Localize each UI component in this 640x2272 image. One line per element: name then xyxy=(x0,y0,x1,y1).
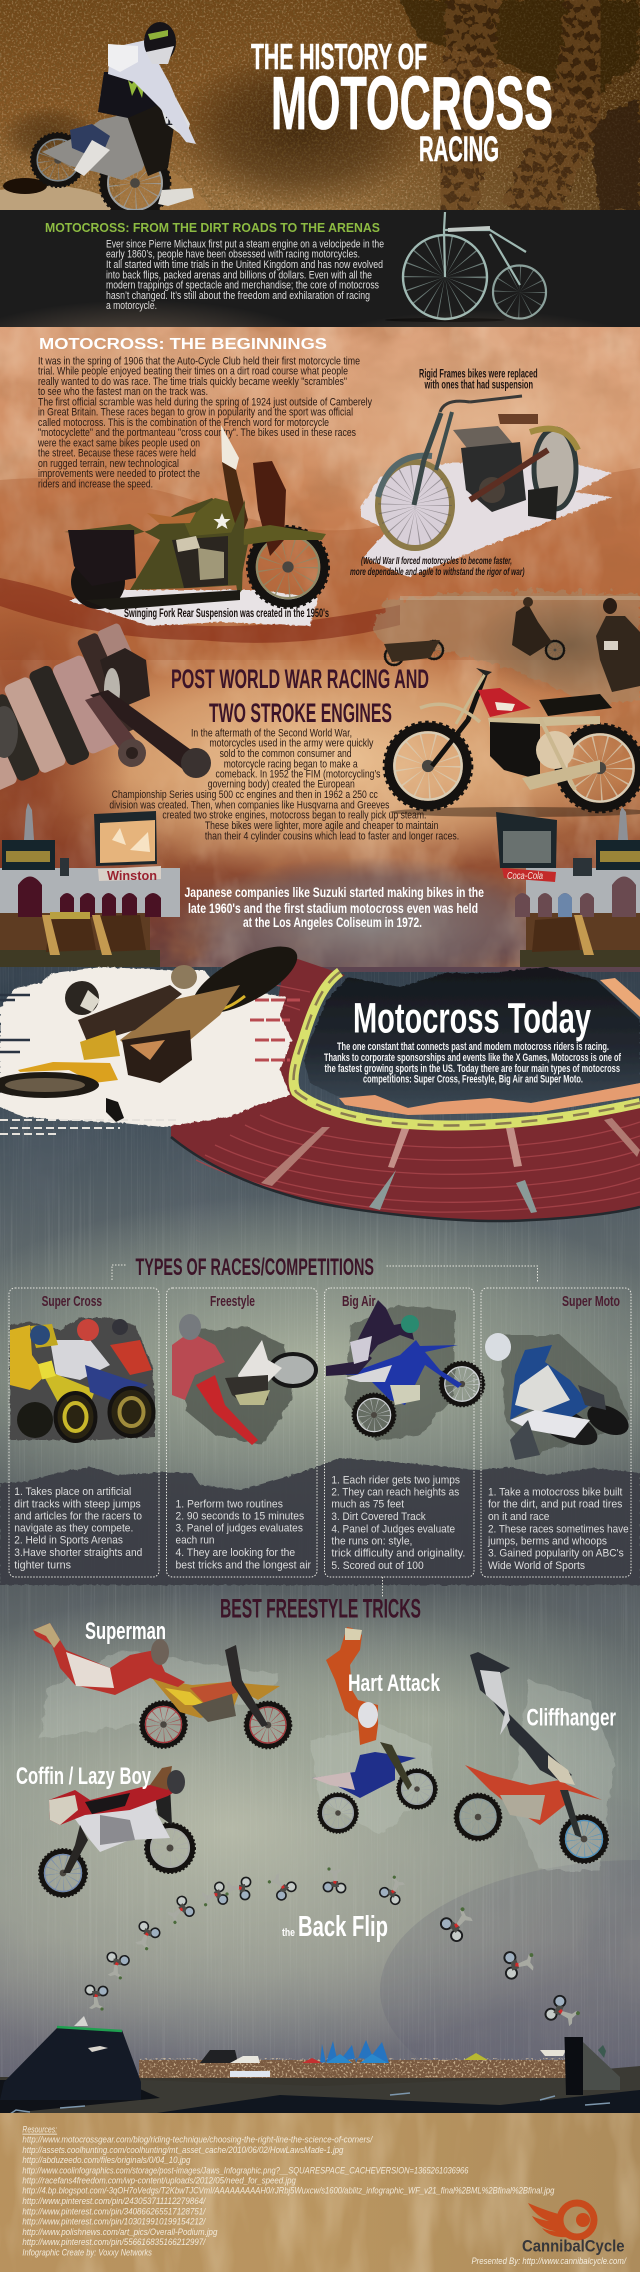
text block: freestyle facts xyxy=(176,1498,311,1571)
text block: freestyle facts: each run xyxy=(176,1535,214,1547)
heading: the beginnings: MOTOCROSS: THE BEGINNINGS xyxy=(39,336,327,353)
trick: superman xyxy=(33,1623,291,1748)
heading: from the dirt roads: MOTOCROSS: FROM THE DIRT ROADS TO THE ARENAS xyxy=(45,221,380,235)
label: the back flip: Back Flip xyxy=(298,1911,388,1943)
text block: the beginnings: "motocyclette" and the portmanteau "cross country". The bikes used in these races xyxy=(38,427,356,439)
illustration: coliseum right xyxy=(496,807,640,968)
photo: motocross rider on bike xyxy=(3,22,196,218)
text block: super moto facts: for the dirt, and put road tires xyxy=(488,1499,623,1511)
text block: post war: Championship Series using 500 cc engines and then in 1962 a 250 cc xyxy=(112,789,378,801)
text block: post war: than their 4 cylinder cousins which lead to faster and longer races. xyxy=(205,830,459,842)
text block: resources: http://racefans4freedom.com/wp-content/uploads/2012/05/need_for_speed.jpg xyxy=(22,2176,296,2186)
photo: crankshaft xyxy=(0,622,211,799)
illustration: mountain silhouette xyxy=(0,1458,640,1585)
text block: super cross facts: 1. Takes place on artificial xyxy=(14,1486,131,1498)
trick: back flip sequence xyxy=(74,1867,583,2031)
text block: post war xyxy=(109,727,459,842)
text block: resources: Resources: xyxy=(22,2125,57,2135)
caption: rigid frames: Rigid Frames bikes were replaced xyxy=(419,366,538,380)
ramp: landing xyxy=(564,2037,583,2095)
scoreboard right xyxy=(496,812,557,882)
text block: resources: http://www.pinterest.com/pin/556616835166212997/ xyxy=(22,2237,207,2247)
text block: resources: http://assets.coolhunting.com/coolhunting/mt_asset_cache/2010/06/02/HowLawsMade-1.jpg xyxy=(22,2145,343,2155)
text block: freestyle facts: 1. Perform two routines xyxy=(176,1498,283,1510)
scoreboard left xyxy=(94,811,161,883)
text block: the beginnings: to see who the fastest man on the track was. xyxy=(38,386,208,398)
text: japanese companies xyxy=(184,885,484,930)
panel: big air xyxy=(324,1288,484,1577)
text block: resources: http://www.polishnews.com/art_pics/Overall-Podium.jpg xyxy=(22,2227,217,2237)
text block: the beginnings: called motocross. This is the combination of the French word for motorcycle xyxy=(38,417,329,429)
caption: rigid frames xyxy=(419,366,538,391)
text: japanese companies: Japanese companies like Suzuki started making bikes in the xyxy=(184,885,484,900)
panel: warm textured history background xyxy=(0,300,640,993)
text block: the beginnings: The first official scramble was held during the spring of 1924 just outside of Camberely xyxy=(38,396,373,408)
text block: the beginnings: It was in the spring of 1906 that the Auto-Cycle Club held their first motorcycle time xyxy=(38,355,360,367)
text block: big air facts: 3. Dirt Covered Track xyxy=(331,1511,426,1523)
trick: hart attack xyxy=(310,1627,437,1835)
text block: motocross today xyxy=(324,1041,621,1086)
photo: rigid frame motorcycle xyxy=(361,396,612,577)
text block: big air facts: 5. Scored out of 100 xyxy=(331,1560,424,1572)
text block: the beginnings: the street. Because these races were held xyxy=(38,448,196,460)
text block: super cross facts: navigate as they compete. xyxy=(14,1523,133,1535)
illustration: stadium seating xyxy=(171,955,640,1221)
text block: super moto facts: 3. Gained popularity on ABC's xyxy=(488,1548,624,1560)
caption: world war II xyxy=(350,556,525,578)
header panel: dirt background xyxy=(0,0,640,215)
label: the back flip: the xyxy=(282,1927,295,1939)
text block: freestyle facts: 3. Panel of judges evaluates xyxy=(176,1523,303,1535)
text block: resources: http://4.bp.blogspot.com/-3qOH7oVedgs/T2KbwTJCVmI/AAAAAAAAAH0/rJRbj5Wuxcw/s1600/ablitz_infographic_WF_v21_final%2BML%2Bfinal%2Bfinal.jpg xyxy=(22,2186,554,2196)
text block: super cross facts: 3.Have shorter straights and xyxy=(14,1547,142,1559)
text block: big air facts: much as 75 feet xyxy=(331,1499,404,1511)
intro text: into back flips, packed arenas and billions of dollars. Even with all the xyxy=(106,269,372,281)
text block: post war: sold to the common consumer and xyxy=(220,748,352,760)
illustration: coliseum left xyxy=(0,803,180,968)
text block: post war: motorcycle racing began to make a xyxy=(224,758,358,770)
icon: penny-farthing bicycle xyxy=(385,212,546,322)
title: THE HISTORY OF xyxy=(251,36,427,77)
text block: resources: http://abduzeedo.com/files/originals/0/04_10.jpg xyxy=(22,2155,190,2165)
trick: coffin lazy boy xyxy=(39,1766,195,1897)
photo: motocross rider on bike: 16 xyxy=(165,112,181,128)
text block: resources: Infographic Create by: Voxxy Networks xyxy=(22,2247,152,2257)
text block: big air facts xyxy=(331,1474,465,1572)
photo: husqvarna two stroke motorcycle xyxy=(384,668,640,817)
logo: cannibal cycle xyxy=(522,2203,624,2256)
text: japanese companies: at the Los Angeles Coliseum in 1972. xyxy=(243,915,422,930)
heading: post world war racing: POST WORLD WAR RACING AND xyxy=(171,664,429,694)
text block: super moto facts: jumps, berms and whoops xyxy=(487,1535,607,1547)
heading: super cross: Super Cross xyxy=(42,1293,102,1310)
panel: cool slate background xyxy=(0,967,640,2120)
title: RACING xyxy=(419,130,499,169)
text block: super cross facts xyxy=(14,1486,142,1571)
logo: cannibal cycle: CannibalCycle xyxy=(522,2237,624,2256)
photo: super moto rider xyxy=(485,1333,633,1460)
text block: big air facts: the runs on: style, xyxy=(331,1535,412,1547)
text block: big air facts: trick difficulty and originality. xyxy=(331,1548,465,1560)
text block: the beginnings: improvements were needed to protect the xyxy=(38,468,200,480)
intro text: It all started with time trials in the United Kingdom and has now evolved xyxy=(106,259,383,271)
trick: cliffhanger xyxy=(455,1652,615,1870)
text block: big air facts: 2. They can reach heights as xyxy=(331,1487,460,1499)
photo: army motorcycle xyxy=(64,425,328,626)
text block: super moto facts xyxy=(487,1487,629,1572)
text block: resources: http://www.coolinfographics.com/storage/post-images/Jaws_Infographic.png?__SQUARESPACE_CACHEVERSION=1365261036966 xyxy=(22,2165,468,2175)
heading: types of races: TYPES OF RACES/COMPETITIONS xyxy=(136,1254,374,1281)
heading: big air: Big Air xyxy=(342,1293,376,1310)
ramp: launch xyxy=(0,2028,141,2100)
label: hart attack: Hart Attack xyxy=(348,1670,440,1697)
panel: super moto xyxy=(481,1288,633,1577)
text block: post war: In the aftermath of the Second World War, xyxy=(191,727,352,739)
caption: rigid frames: with ones that had suspension xyxy=(424,377,533,391)
text block: resources: http://www.pinterest.com/pin/243053711112279864/ xyxy=(22,2196,207,2206)
text block: the beginnings: in Great Britain. These races began to grow in popularity and the sport was official xyxy=(38,407,353,419)
intro text: a motorcycle. xyxy=(106,300,157,312)
illustration: ground, ramps and crowd xyxy=(0,2027,640,2114)
text block: resources xyxy=(22,2125,554,2257)
text block: super cross facts: dirt tracks with steep jumps xyxy=(14,1498,141,1510)
photo: rider with white splash xyxy=(0,933,307,1134)
label: superman: Superman xyxy=(85,1618,166,1645)
text block: the beginnings: really wanted to do was race. The time trials quickly became weekly "scrambles" xyxy=(38,376,347,388)
text: japanese companies: late 1960's and the first stadium motocross even was held xyxy=(188,901,478,916)
text block: resources: http://www.motocrossgear.com/blog/riding-technique/choosing-the-right-line-the-science-of-corners/ xyxy=(22,2135,374,2145)
text block: super moto facts: Wide World of Sports xyxy=(488,1560,585,1572)
heading: freestyle: Freestyle xyxy=(210,1293,255,1310)
text block: super moto facts: 2. These races sometimes have xyxy=(488,1523,629,1535)
caption: world war II: more dependable and agile to withstand the rigor of war) xyxy=(350,567,525,578)
text block: post war: created two stroke engines, motocross began to really pick up steam. xyxy=(162,809,426,821)
text block: the beginnings: riders and increase the speed. xyxy=(38,478,153,490)
text block: super moto facts: on it and race xyxy=(488,1511,549,1523)
text block: freestyle facts: 4. They are looking for the xyxy=(176,1547,295,1559)
scoreboard right: Coca-Cola xyxy=(507,871,543,882)
caption: swinging fork: Swinging Fork Rear Suspension was created in the 1950's xyxy=(124,606,329,620)
panel: from the dirt roads to the arenas xyxy=(0,210,640,327)
text block: post war: governing body) created the European xyxy=(208,779,355,791)
text block: super cross facts: tighter turns xyxy=(14,1559,71,1571)
label: the back flip xyxy=(282,1911,388,1943)
text block: post war: motorcycles used in the army were quickly xyxy=(209,738,374,750)
panel: motocross today xyxy=(304,967,640,1115)
intro text: Ever since Pierre Michaux first put a steam engine on a velocipede in the xyxy=(106,238,384,250)
panel: resources footer xyxy=(0,2113,640,2272)
text block: post war: comeback. In 1952 the FIM (motorcycling's xyxy=(216,768,380,780)
heading: post world war racing xyxy=(171,664,429,728)
intro text: modern trappings of spectacle and merchandise; the core of motocross xyxy=(106,280,379,292)
intro text: hasn’t changed. It’s still about the freedom and exhilaration of racing xyxy=(106,290,370,302)
heading: best freestyle tricks: BEST FREESTYLE TRICKS xyxy=(220,1594,421,1624)
text block: super moto facts: 1. Take a motocross bike built xyxy=(488,1487,622,1499)
text block: big air facts: 1. Each rider gets two jumps xyxy=(331,1474,460,1486)
photo: riders in pack xyxy=(10,1318,155,1441)
text block: the beginnings: were the exact same bikes people used on xyxy=(37,437,200,449)
text block: freestyle facts: 2. 90 seconds to 15 minutes xyxy=(176,1510,305,1522)
text block: big air facts: 4. Panel of Judges evaluate xyxy=(331,1523,455,1535)
photo: big air rider xyxy=(326,1300,484,1440)
photo: freestyle rider xyxy=(172,1314,316,1445)
title xyxy=(251,36,553,169)
panel: super cross xyxy=(9,1288,159,1577)
text block: the beginnings xyxy=(37,355,373,490)
intro text xyxy=(106,238,384,312)
text block: resources: http://www.pinterest.com/pin/340866265517128751/ xyxy=(22,2206,207,2216)
label: coffin lazy boy: Coffin / Lazy Boy xyxy=(16,1763,151,1790)
text block: post war: These bikes were lighter, more agile and cheaper to maintain xyxy=(205,820,438,832)
panel: freestyle xyxy=(166,1288,317,1577)
scoreboard left: Winston xyxy=(107,868,157,883)
caption: world war II: (World War II forced motorcycles to become faster, xyxy=(361,556,512,567)
text block: super cross facts: 2. Held in Sports Arenas xyxy=(14,1535,123,1547)
heading: post world war racing: TWO STROKE ENGINES xyxy=(209,698,392,728)
text block: freestyle facts: best tricks and the longest air xyxy=(176,1559,311,1571)
text block: super cross facts: and articles for the racers to xyxy=(14,1510,142,1522)
text block: post war: division was created. Then, when companies like Husqvarna and Greeves xyxy=(109,799,389,811)
intro text: early 1860’s, people have been obsessed with racing motorcycles. xyxy=(106,249,360,261)
text block: the beginnings: trial. While people enjoyed beating their times on a dirt road course what people xyxy=(38,366,348,378)
photo: vintage racers sepia xyxy=(374,591,640,704)
text block: the beginnings: on rugged terrain, new technological xyxy=(38,458,179,470)
text block: resources: http://www.pinterest.com/pin/103019910199154212/ xyxy=(22,2217,207,2227)
